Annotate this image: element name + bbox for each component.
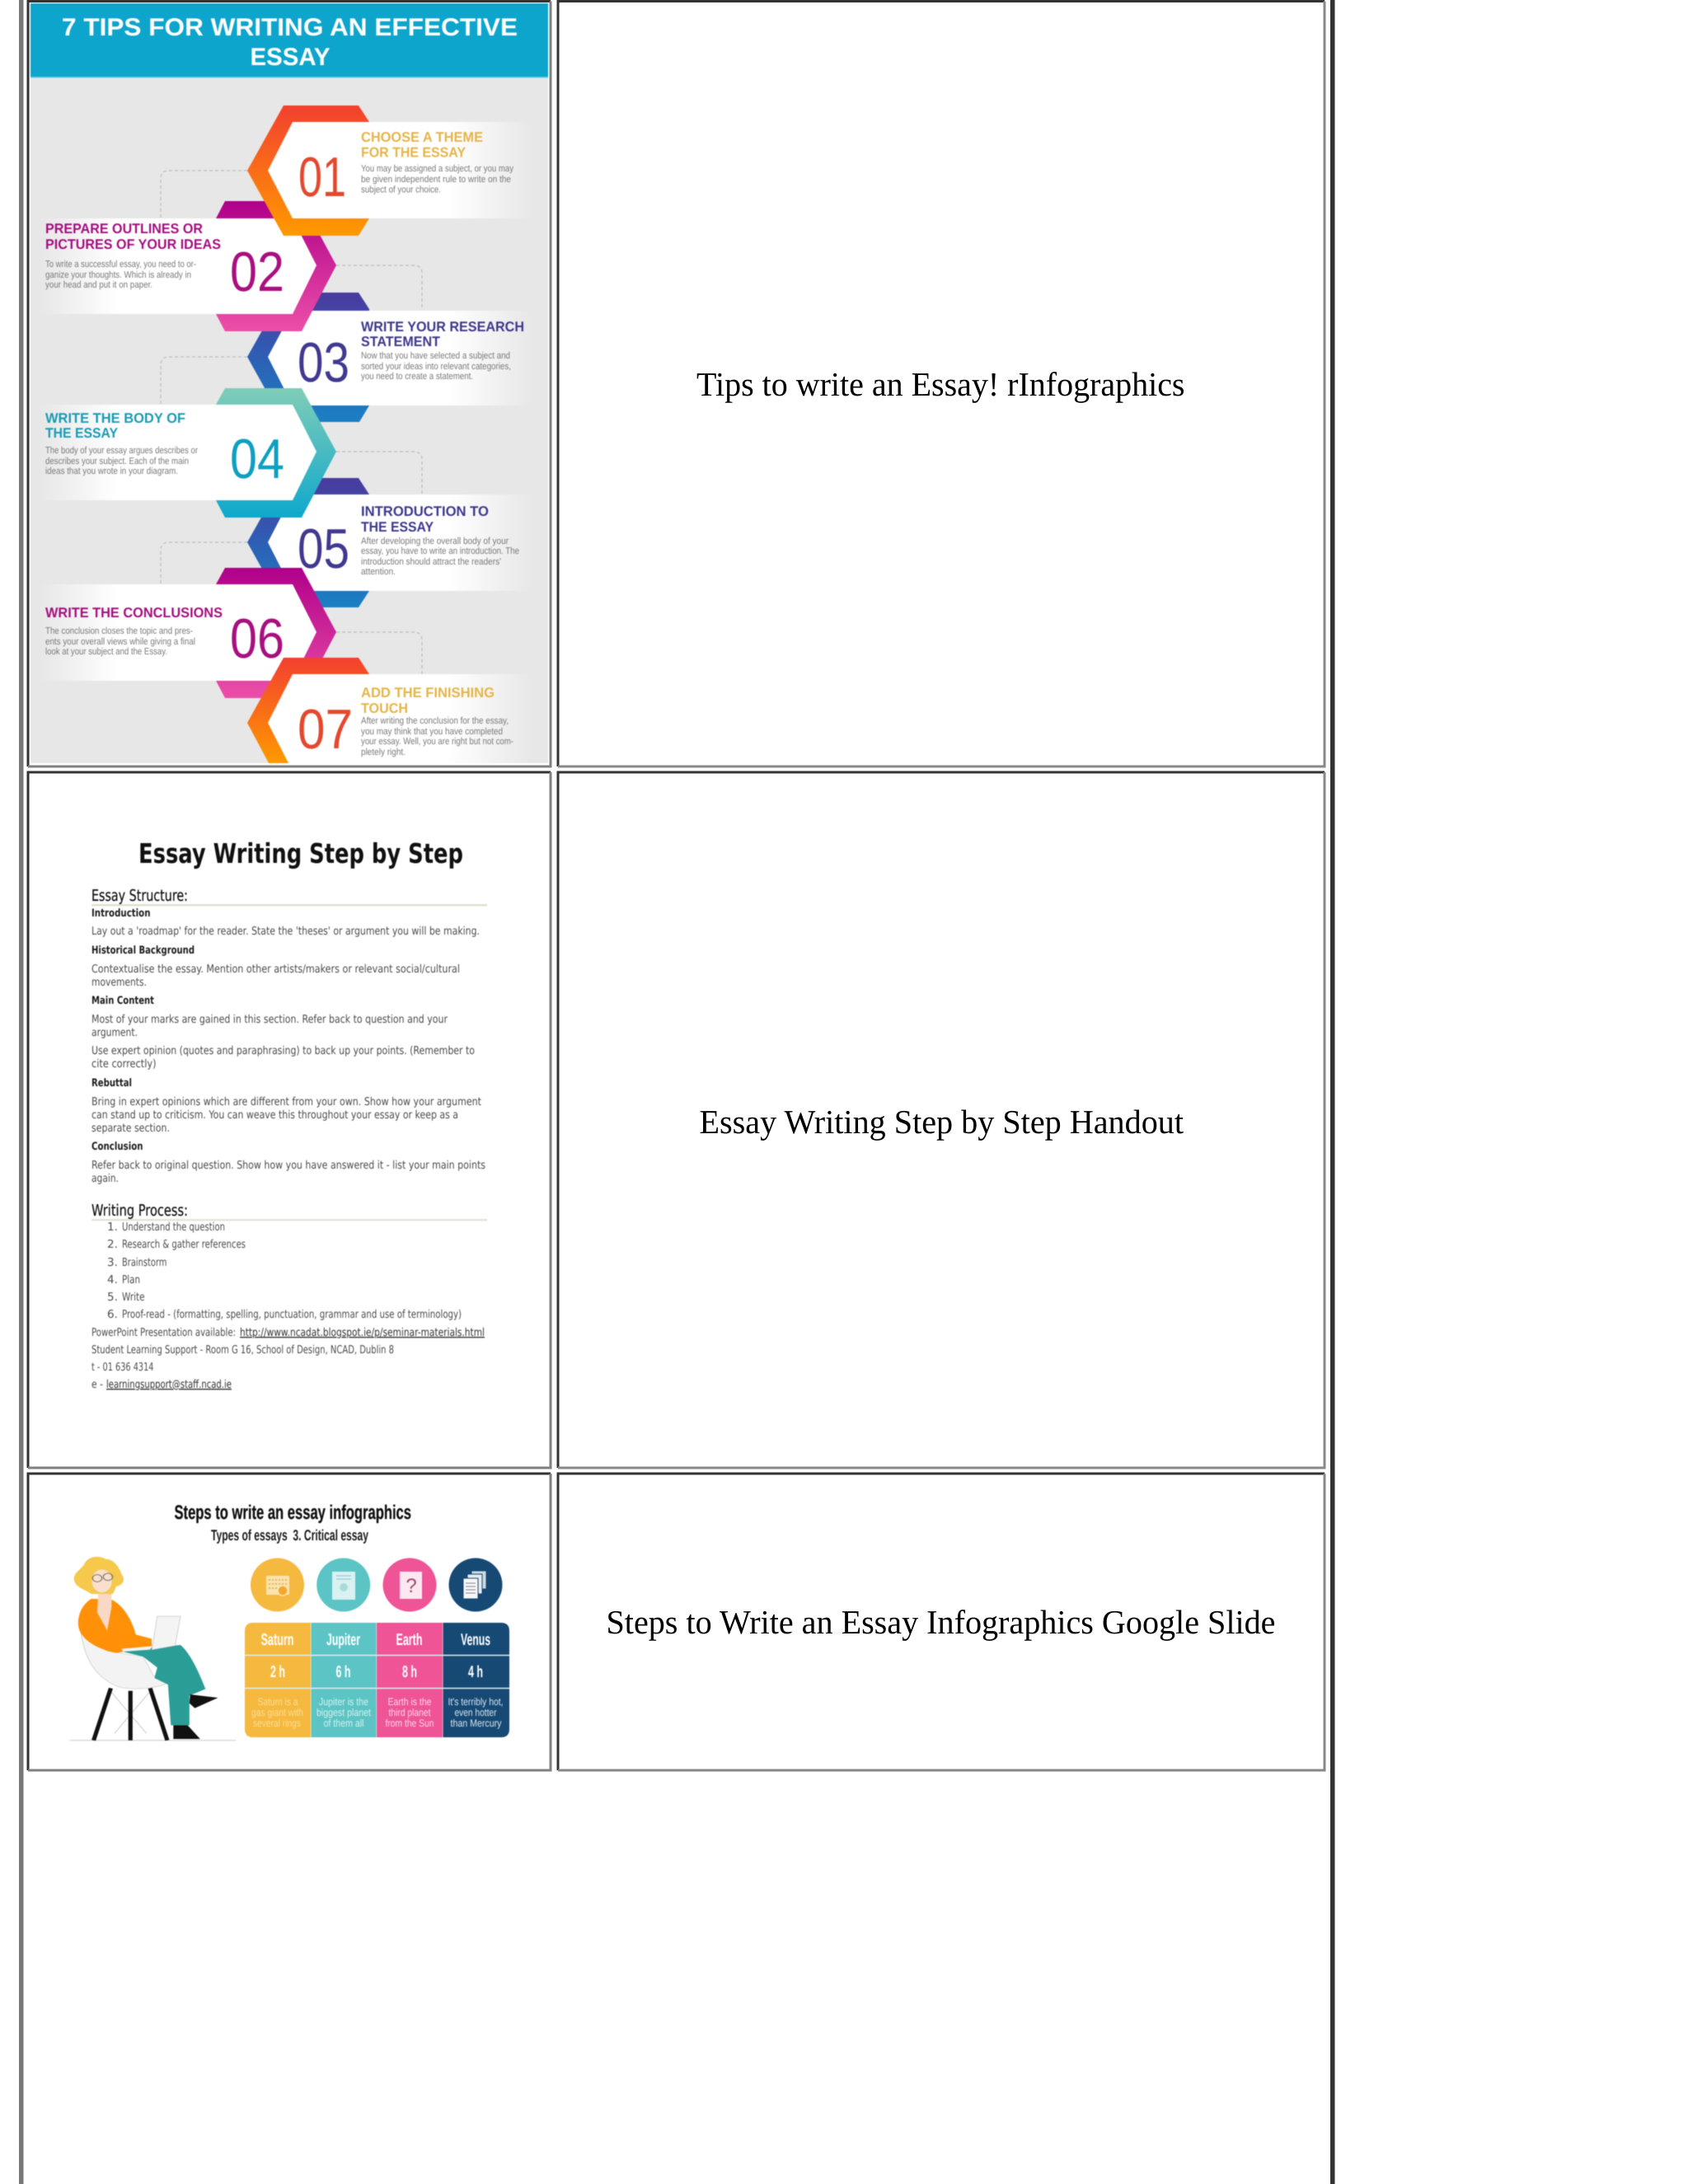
step 05: 05 <box>298 518 349 580</box>
step 05 <box>247 478 533 607</box>
essay structure section: separate section. <box>91 1122 170 1135</box>
step 01: You may be assigned a subject, or you may <box>361 164 513 174</box>
column: Saturn: gas giant with <box>251 1707 303 1718</box>
step 06: ents your overall views while giving a final <box>45 637 195 647</box>
writing process section: learningsupport@staff.ncad.ie <box>106 1378 232 1391</box>
writing process section: e - <box>91 1378 103 1391</box>
column: Jupiter: 6 h <box>336 1663 351 1681</box>
writing process section: PowerPoint Presentation available: <box>91 1326 236 1339</box>
panel: row 1 caption cell <box>558 2 1325 766</box>
step 01: 01 <box>298 146 346 209</box>
essay structure section: argument. <box>91 1026 138 1039</box>
essay structure section: cite correctly) <box>91 1057 157 1071</box>
title banner: 7 TIPS FOR WRITING AN EFFECTIVE <box>62 14 518 41</box>
writing process section: 3. <box>107 1256 118 1269</box>
step 03 <box>247 293 533 422</box>
step 04: THE ESSAY <box>45 425 119 441</box>
step 04: WRITE THE BODY OF <box>45 410 185 426</box>
panel: row 1 image cell <box>28 2 551 766</box>
title banner: ESSAY <box>251 44 330 71</box>
slide subtitle: Types of essays 3. Critical essay <box>211 1526 368 1544</box>
column: Earth: 8 h <box>402 1663 417 1681</box>
column: Earth <box>377 1623 443 1737</box>
step 07: After writing the conclusion for the essay, <box>361 716 509 726</box>
step 01: be given independent rule to write on the <box>361 175 511 185</box>
column: Venus <box>443 1623 509 1737</box>
writing process section: http://www.ncadat.blogspot.ie/p/seminar-materials.html <box>240 1326 485 1339</box>
writing process section: t - 01 636 4314 <box>91 1361 153 1374</box>
column: Earth: Earth <box>396 1631 422 1649</box>
essay structure section: Contextualise the essay. Mention other artists/makers or relevant social/cultural <box>91 963 460 976</box>
column: Earth: Earth is the <box>387 1696 432 1708</box>
column: Jupiter: of them all <box>323 1718 364 1729</box>
column: Venus: It's terribly hot, <box>448 1696 503 1708</box>
step 03: STATEMENT <box>361 334 441 349</box>
step 01: subject of your choice. <box>361 185 441 194</box>
writing process section: Write <box>122 1291 145 1304</box>
step 06: 06 <box>230 607 284 670</box>
essay structure section: Lay out a 'roadmap' for the reader. State the 'theses' or argument you will be making. <box>91 925 480 938</box>
step 05: THE ESSAY <box>361 519 434 535</box>
step 03: sorted your ideas into relevant categories, <box>361 362 511 372</box>
essay structure section <box>91 887 487 1185</box>
step 06: look at your subject and the Essay. <box>45 647 167 657</box>
writing process section: 4. <box>107 1273 118 1286</box>
writing process section: Proof-read - (formatting, spelling, punctuation, grammar and use of terminology) <box>122 1308 462 1321</box>
step 05: attention. <box>361 567 396 577</box>
step 04: describes your subject. Each of the main <box>45 457 189 466</box>
essay structure section: again. <box>91 1172 119 1185</box>
column: Saturn: Saturn is a <box>257 1696 298 1708</box>
step 07: your essay. Well, you are right but not com- <box>361 737 513 747</box>
column: Earth: third planet <box>389 1707 431 1718</box>
writing process section: 2. <box>107 1238 118 1251</box>
title banner <box>30 3 548 77</box>
essay structure section: Introduction <box>91 907 150 920</box>
essay structure section: can stand up to criticism. You can weave this throughout your essay or keep as a <box>91 1108 458 1122</box>
step 07 <box>247 658 533 763</box>
writing process section: 6. <box>107 1308 118 1321</box>
step 03: WRITE YOUR RESEARCH <box>361 319 524 335</box>
step 07: TOUCH <box>361 701 408 716</box>
column: Venus: than Mercury <box>450 1718 502 1729</box>
column: Earth: from the Sun <box>386 1718 434 1729</box>
essay structure section: Use expert opinion (quotes and paraphrasing) to back up your points. (Remember to <box>91 1044 475 1057</box>
essay structure section: Bring in expert opinions which are different from your own. Show how your argument <box>91 1095 481 1108</box>
essay structure section: Essay Structure: <box>91 887 188 905</box>
step 06: WRITE THE CONCLUSIONS <box>45 605 223 621</box>
step 05: After developing the overall body of your <box>361 537 509 546</box>
step 03: you need to create a statement. <box>361 372 473 382</box>
column: Jupiter <box>312 1623 376 1737</box>
writing process section <box>91 1202 487 1391</box>
infographic: 7 tips for writing an effective essay <box>30 3 548 763</box>
step 04 <box>40 388 336 518</box>
writing process section: Brainstorm <box>122 1256 166 1269</box>
outer table border right <box>1330 0 1335 2184</box>
writing process section: 1. <box>107 1221 118 1234</box>
planets table <box>245 1623 509 1737</box>
essay structure section: Historical Background <box>91 944 195 957</box>
icon: stacked documents <box>448 1558 503 1612</box>
icon: document <box>316 1558 370 1612</box>
essay structure section: Conclusion <box>91 1141 143 1153</box>
step 04: ideas that you wrote in your diagram. <box>45 466 178 476</box>
step 07: you may think that you have completed <box>361 727 503 737</box>
panel: row 2 caption cell <box>558 772 1325 1468</box>
handout: essay writing step by step <box>91 837 487 1391</box>
icon: notebook question <box>382 1558 437 1612</box>
essay structure section: Most of your marks are gained in this section. Refer back to question and your <box>91 1013 448 1026</box>
column: Saturn: several rings <box>253 1718 301 1729</box>
essay structure section: Refer back to original question. Show how you have answered it - list your main points <box>91 1159 485 1172</box>
panel: row 3 image cell <box>28 1474 551 1770</box>
step 05: essay, you have to write an introduction. The <box>361 546 519 556</box>
writing process section: Understand the question <box>122 1221 225 1234</box>
column: Saturn: 2 h <box>270 1663 285 1681</box>
panel: row 2 image cell <box>28 772 551 1468</box>
step 06 <box>40 568 336 698</box>
step 02: PREPARE OUTLINES OR <box>45 221 203 237</box>
step 02: your head and put it on paper. <box>45 280 152 290</box>
step 02 <box>40 201 336 331</box>
dashed connectors <box>161 171 422 674</box>
panel: row 3 caption cell <box>558 1474 1325 1770</box>
step 06: The conclusion closes the topic and pres- <box>45 626 193 636</box>
step 04: 04 <box>230 428 284 490</box>
essay structure section: Rebuttal <box>91 1077 132 1090</box>
writing process section: Student Learning Support - Room G 16, School of Design, NCAD, Dublin 8 <box>91 1343 394 1357</box>
writing process section: Research & gather references <box>122 1238 246 1251</box>
illustration: woman with laptop on chair <box>70 1557 236 1741</box>
column: Venus: Venus <box>461 1631 490 1649</box>
step 05: introduction should attract the readers' <box>361 557 501 567</box>
step 07: pletely right. <box>361 748 406 757</box>
caption: essay writing handout: Essay Writing Step by Step Handout <box>699 1103 1184 1141</box>
column: Saturn <box>245 1623 311 1737</box>
step 04: The body of your essay argues describes or <box>45 446 198 456</box>
slide title: Steps to write an essay infographics <box>175 1502 411 1524</box>
column: Venus: 4 h <box>468 1663 483 1681</box>
step 02: PICTURES OF YOUR IDEAS <box>45 237 221 252</box>
column: Jupiter: Jupiter is the <box>319 1696 368 1708</box>
caption: steps to write an essay infographics google slide: Steps to Write an Essay Infographics Google Slide <box>607 1603 1276 1641</box>
step 02: 02 <box>230 241 284 303</box>
column: Saturn: Saturn <box>260 1631 293 1649</box>
icon: calendar <box>251 1558 304 1612</box>
step 02: ganize your thoughts. Which is already in <box>45 270 191 280</box>
step 02: To write a successful essay, you need to or- <box>45 260 196 269</box>
slide: steps to write an essay infographics <box>70 1502 509 1741</box>
icon: notebook question: ? <box>406 1575 417 1597</box>
writing process section: 5. <box>107 1291 118 1304</box>
icon circles <box>251 1558 503 1612</box>
step 01: CHOOSE A THEME <box>361 129 483 145</box>
step 07: ADD THE FINISHING <box>361 685 495 701</box>
column: Jupiter: biggest planet <box>316 1707 371 1718</box>
step 01 <box>247 105 533 236</box>
step 07: 07 <box>298 698 353 761</box>
writing process section: Plan <box>122 1273 140 1286</box>
column: Jupiter: Jupiter <box>326 1631 360 1649</box>
handout title: Essay Writing Step by Step <box>138 837 463 869</box>
essay structure section: Main Content <box>91 995 154 1007</box>
essay structure section: movements. <box>91 976 147 989</box>
step 03: 03 <box>298 331 349 394</box>
step 01: FOR THE ESSAY <box>361 145 467 160</box>
step 03: Now that you have selected a subject and <box>361 351 510 361</box>
outer table border left <box>19 0 23 2184</box>
caption: tips to write an essay: Tips to write an Essay! rInfographics <box>696 365 1185 403</box>
step 05: INTRODUCTION TO <box>361 504 489 519</box>
writing process section: Writing Process: <box>91 1202 188 1220</box>
column: Venus: even hotter <box>455 1707 496 1718</box>
